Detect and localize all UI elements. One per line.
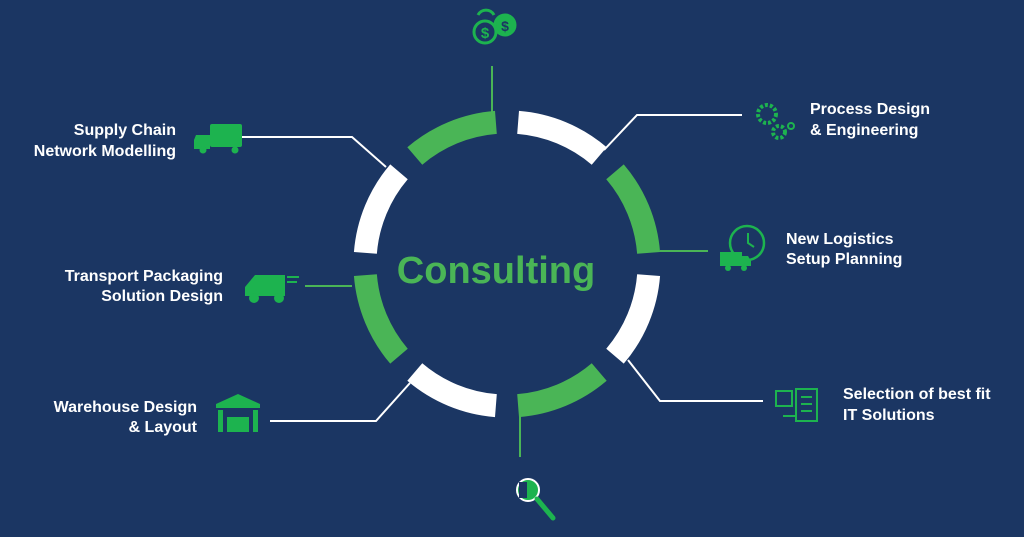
label: supply chain [34, 122, 176, 160]
label: warehouse: & Layout [129, 419, 198, 436]
label: transport packaging [65, 268, 223, 305]
label: warehouse [54, 399, 198, 436]
label: process design [810, 101, 930, 139]
label: new logistics [786, 231, 902, 268]
icon: coins: $ [481, 25, 490, 42]
ring [365, 122, 649, 406]
icon: clock van [720, 226, 764, 271]
label: new logistics: New Logistics [786, 231, 894, 248]
icon: it [776, 389, 817, 421]
icon: coins [474, 10, 515, 43]
label: supply chain: Supply Chain [74, 122, 176, 139]
label: it solutions: IT Solutions [843, 407, 935, 424]
icon: coins: $ [501, 18, 509, 34]
label: transport packaging: Transport Packaging [65, 268, 223, 285]
label: new logistics: Setup Planning [786, 251, 902, 268]
icon: truck [194, 124, 242, 154]
label: warehouse: Warehouse Design [54, 399, 197, 416]
icon: van [245, 275, 299, 303]
connectors [240, 66, 763, 457]
icon: magnifier [517, 479, 553, 518]
icon: gears [758, 105, 794, 138]
icon: warehouse [216, 394, 260, 432]
label: process design: & Engineering [810, 122, 918, 139]
label: transport packaging: Solution Design [101, 288, 223, 305]
title: Consulting [397, 250, 595, 292]
label: supply chain: Network Modelling [34, 143, 176, 160]
label: it solutions: Selection of best fit [843, 386, 991, 403]
label: it solutions [843, 386, 991, 424]
label: process design: Process Design [810, 101, 930, 118]
